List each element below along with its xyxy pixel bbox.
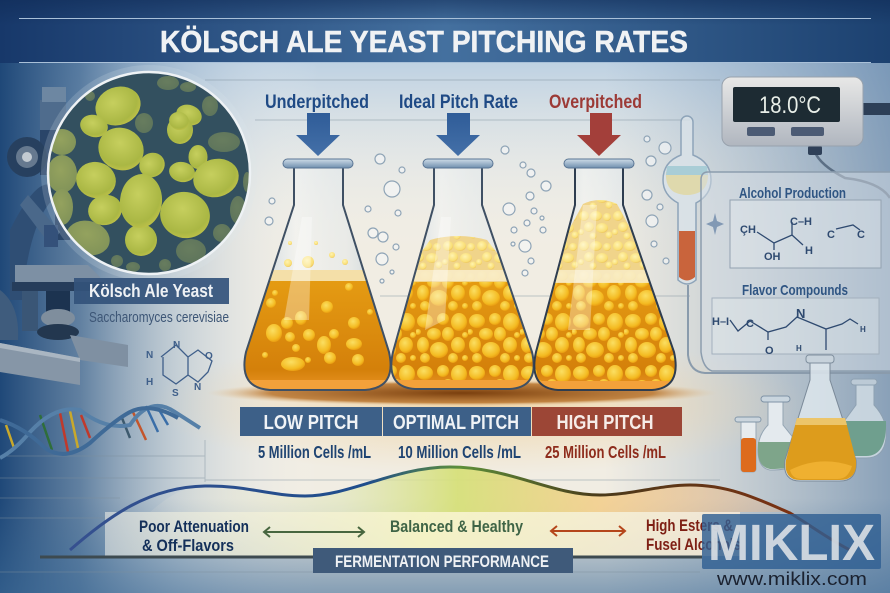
flavor compounds: H: [796, 344, 802, 353]
flavor compounds: N: [796, 306, 805, 321]
alcohol production: ÇH: [740, 224, 756, 236]
icon: molecule: N: [194, 382, 201, 393]
optimal pitch header: [383, 407, 531, 436]
label: Kölsch Ale Yeast: [74, 278, 229, 304]
axis label: fermentation performance: [313, 548, 573, 573]
optimal pitch header: OPTIMAL PITCH: [393, 412, 519, 434]
alcohol production: Alcohol Production: [739, 186, 846, 202]
alcohol production: H: [805, 245, 813, 257]
panel: chemistry: [701, 172, 890, 371]
alcohol production: [730, 186, 881, 268]
flavor compounds: H–I: [712, 316, 729, 328]
heading: Underpitched: Underpitched: [265, 92, 369, 113]
icon: molecule: O: [205, 351, 213, 362]
alcohol production: C–H: [790, 216, 812, 228]
icon: molecule: S: [172, 388, 179, 399]
arrow: underpitched: [296, 113, 340, 156]
species name: Saccharomyces cerevisiae: [89, 309, 229, 326]
flask: low pitch: [243, 158, 391, 391]
yeast cells: [262, 241, 373, 371]
flask: high pitch: [534, 158, 677, 391]
chart: fermentation performance curve: [40, 467, 850, 557]
low rate: 5 Million Cells /mL: [258, 442, 371, 462]
flask: optimal pitch: [391, 158, 534, 390]
flavor compounds: H: [860, 325, 866, 334]
flavor compounds: Flavor Compounds: [742, 282, 848, 299]
surface stain under flasks: [207, 380, 717, 406]
high pitch outcome: High Esters &: [646, 516, 733, 535]
icon: molecule: N: [146, 350, 153, 361]
heading: Overpitched: Overpitched: [549, 92, 642, 113]
low pitch header: [240, 407, 382, 436]
watermark: Miklix: www.miklix.com: [716, 569, 867, 589]
icon: DNA helix: [0, 406, 200, 458]
flavor compounds: C: [746, 318, 754, 330]
flavor compounds: O: [765, 345, 774, 357]
magnified yeast circle: [41, 65, 257, 281]
alcohol production: C: [857, 229, 865, 241]
sparkle: [706, 213, 724, 235]
heading: Ideal Pitch Rate: Ideal Pitch Rate: [399, 92, 518, 113]
arrow: ideal: [436, 113, 480, 156]
high pitch header: [532, 407, 682, 436]
icon: microscope: [0, 87, 128, 385]
faded background yeast cells: [85, 76, 251, 272]
bright yeast cells: [47, 80, 243, 260]
alcohol production: OH: [764, 251, 781, 263]
hydrometer: [663, 116, 890, 373]
arrow: overpitched: [577, 113, 621, 156]
arrow: low to balanced: [264, 527, 364, 537]
title band: [0, 0, 890, 63]
floating bubbles: [265, 136, 671, 283]
low pitch outcome: Poor Attenuation: [139, 517, 249, 536]
flavor compounds: [712, 282, 879, 357]
digital thermometer: [722, 77, 890, 198]
arrow: balanced to high: [551, 526, 625, 536]
table: pitch rates: [240, 407, 682, 462]
big flask: [785, 362, 856, 481]
balanced outcome: Balanced & Healthy: [390, 517, 523, 536]
high rate: 25 Million Cells /mL: [545, 442, 666, 462]
temperature reading: 18.0°C: [759, 92, 821, 119]
alcohol production: C: [827, 229, 835, 241]
green flask: [758, 402, 795, 470]
axis label: fermentation performance: FERMENTATION PERFORMANCE: [335, 553, 549, 571]
high pitch header: HIGH PITCH: [556, 412, 654, 434]
low pitch outcome: & Off-Flavors: [142, 536, 234, 555]
test tube: [741, 420, 756, 472]
icon: molecule: [146, 340, 213, 399]
lab glassware: [735, 355, 886, 481]
small right flask: [845, 384, 886, 458]
icon: molecule: N: [173, 340, 180, 351]
title: KÖLSCH ALE YEAST PITCHING RATES: [160, 24, 688, 59]
icon: molecule: H: [146, 377, 153, 388]
optimal rate: 10 Million Cells /mL: [398, 442, 521, 462]
high pitch outcome: Fusel Alcohols: [646, 535, 741, 554]
watermark: Miklix: MIKLIX: [708, 514, 875, 571]
low pitch header: LOW PITCH: [264, 412, 358, 434]
label: Kölsch Ale Yeast: Kölsch Ale Yeast: [89, 281, 213, 301]
